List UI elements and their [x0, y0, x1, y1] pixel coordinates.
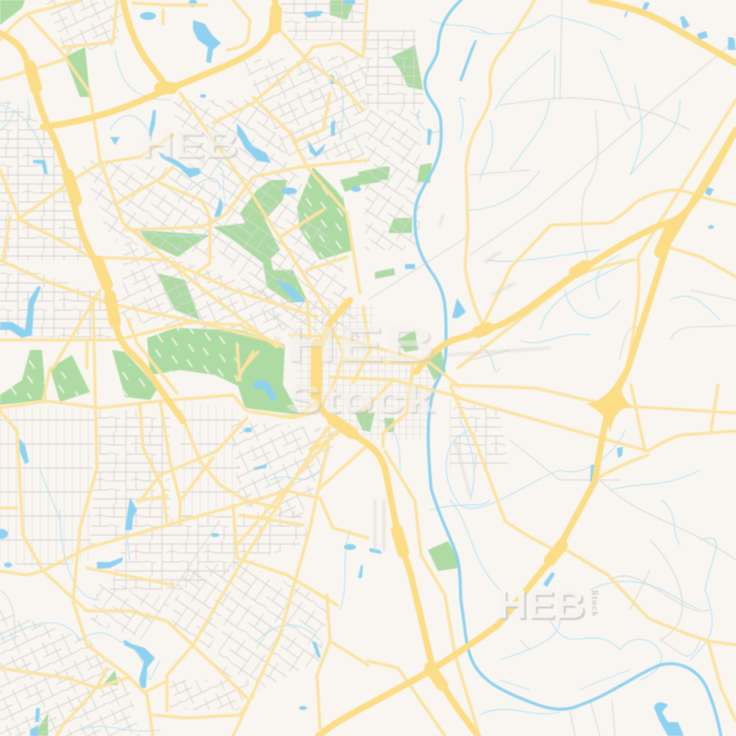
- watermark: HEB lower right: Stock: [590, 590, 599, 617]
- watermark: HEB upper left: HEB: [140, 124, 238, 166]
- parks: [0, 0, 458, 736]
- watermark: center: HEB: [285, 316, 435, 372]
- watermark: center: Stock: [285, 379, 436, 421]
- river: [415, 0, 721, 736]
- watermark: center: [285, 316, 438, 423]
- park mottling: [0, 167, 353, 402]
- watermark: center: HEB: [287, 318, 437, 374]
- watermark: HEB lower right: HEB: [497, 583, 585, 627]
- watermark: faint streaks: [375, 215, 550, 550]
- watermark: center: Stock: [287, 381, 438, 423]
- street grid neighbourhoods: [0, 0, 510, 736]
- interchanges: [30, 10, 672, 685]
- watermark: HEB lower right: HEB: [499, 585, 587, 629]
- watermark: HEB upper left: HEB: [142, 126, 240, 168]
